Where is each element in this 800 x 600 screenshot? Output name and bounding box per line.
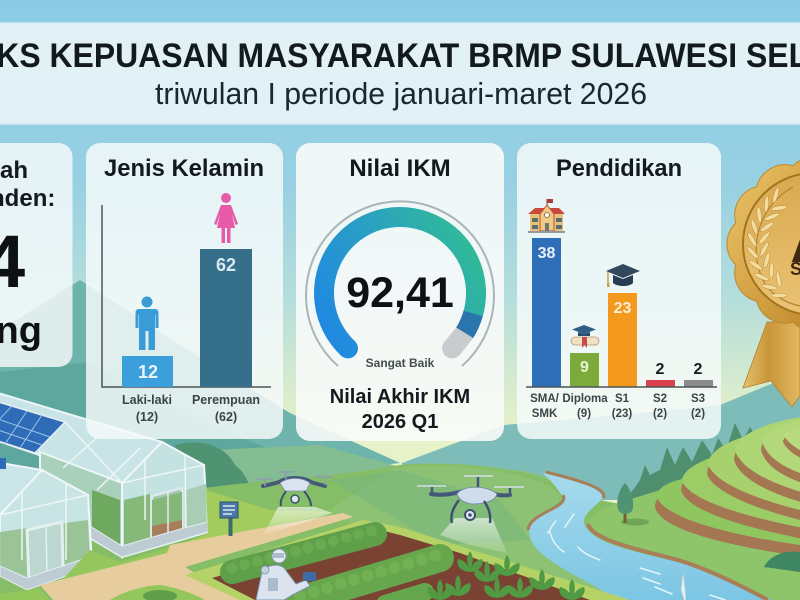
- front greenhouse: [0, 458, 92, 590]
- score: 92,41: [346, 269, 454, 317]
- gauge: [306, 201, 494, 366]
- lawns behind path: [62, 490, 333, 590]
- bar chart: gender: [102, 193, 271, 424]
- icon: male: [136, 296, 158, 350]
- green right bank: [588, 440, 800, 600]
- dark hill behind greenhouse: [175, 442, 250, 497]
- axis label smk: SMK: [532, 408, 558, 420]
- axis label sma: SMA/: [530, 393, 560, 405]
- bar diploma: [570, 353, 599, 387]
- value diploma: 9: [580, 359, 589, 376]
- value female: 62: [216, 255, 236, 275]
- medal inner disc: [743, 173, 800, 315]
- rating: Sangat Baik: [366, 356, 435, 370]
- river: [529, 473, 772, 600]
- axis count male: (12): [136, 410, 158, 424]
- value s1: 23: [614, 300, 632, 317]
- gold medal badge: [727, 157, 800, 407]
- river ripples: [548, 514, 725, 600]
- bar female: [200, 249, 252, 387]
- axis count s2: (2): [653, 408, 667, 420]
- forest tree line: [620, 423, 800, 520]
- panel: nilai ikm: [296, 143, 504, 441]
- panel: pendidikan: [517, 143, 721, 439]
- bar male: [122, 356, 173, 387]
- landscape scene: [0, 280, 800, 600]
- axis label male: Laki-laki: [122, 393, 172, 407]
- axis label s2: S2: [653, 393, 667, 405]
- icon: female: [214, 193, 238, 243]
- medal scalloped edge: [727, 157, 800, 331]
- robot: [256, 549, 316, 600]
- beige paths: [40, 513, 353, 600]
- heading: Nilai IKM: [349, 155, 451, 182]
- bar sma: [532, 238, 561, 387]
- wind turbine: [614, 572, 686, 600]
- subtitle: triwulan I periode januari-maret 2026: [155, 76, 647, 111]
- mid light slope: [330, 470, 530, 545]
- bar s3: [684, 380, 713, 387]
- ribbon tails: [743, 322, 800, 407]
- bush bottom right: [764, 552, 800, 572]
- panel: jenis kelamin: [86, 143, 283, 439]
- wreath: [746, 187, 800, 306]
- heading: Pendidikan: [556, 155, 682, 182]
- axis label s1: S1: [615, 393, 630, 405]
- heading: Jenis Kelamin: [104, 155, 264, 182]
- rice terraces: [655, 415, 800, 560]
- far mountains: [0, 280, 800, 520]
- title banner: [0, 23, 800, 124]
- central field right of drone: [330, 466, 630, 600]
- river banks: [528, 472, 768, 600]
- value s3: 2: [694, 361, 703, 378]
- axis label female: Perempuan: [192, 393, 260, 407]
- value s2: 2: [656, 361, 665, 378]
- icon: school: [528, 199, 565, 233]
- panel: jumlah responden: [0, 143, 72, 367]
- single tree: [617, 483, 649, 526]
- axis count s3: (2): [691, 408, 705, 420]
- axis count diploma: (9): [577, 408, 591, 420]
- drone right: [417, 476, 524, 553]
- bar chart: education: [526, 199, 717, 420]
- crop field: [185, 520, 630, 600]
- back greenhouse: [0, 392, 208, 557]
- bar s2: [646, 380, 675, 387]
- axis count female: (62): [215, 410, 237, 424]
- axis count s1: (23): [612, 408, 632, 420]
- value male: 12: [138, 362, 158, 382]
- value sma: 38: [538, 245, 556, 262]
- green ground: [0, 463, 800, 600]
- axis label s3: S3: [691, 393, 705, 405]
- caption line two: 2026 Q1: [362, 411, 438, 433]
- bar s1: [608, 293, 637, 387]
- lawns on path: [0, 585, 205, 600]
- solar panel: [0, 401, 65, 453]
- icon: diploma: [571, 325, 599, 348]
- axis label diploma: Diploma: [562, 393, 608, 405]
- sign board: [220, 502, 238, 536]
- icon: graduation cap: [606, 264, 640, 287]
- caption line one: Nilai Akhir IKM: [330, 386, 470, 408]
- drone left: [257, 472, 333, 534]
